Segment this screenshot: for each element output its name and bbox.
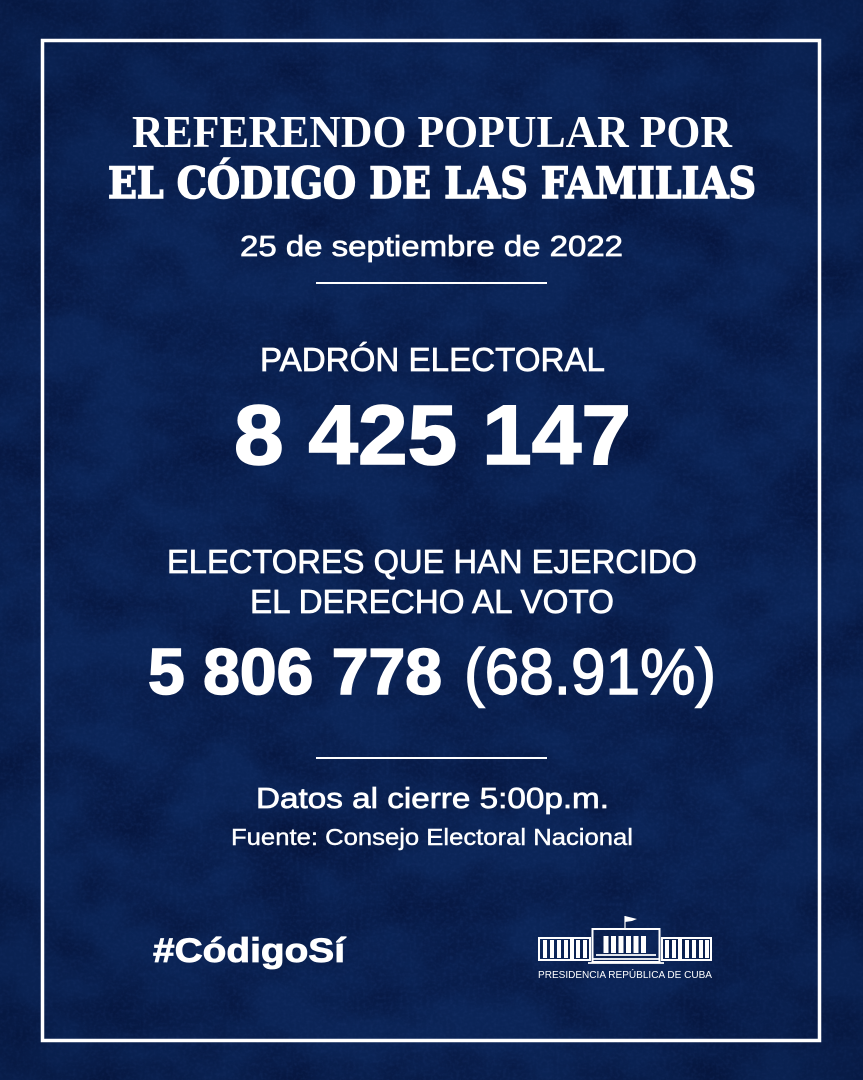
window bars — [545, 940, 707, 958]
logo text: PRESIDENCIA REPÚBLICA DE CUBA — [538, 968, 712, 981]
heading: voters — [167, 543, 697, 620]
number: electoral roll: 8 425 147 — [234, 388, 631, 482]
source: Fuente: Consejo Electoral Nacional — [231, 824, 633, 850]
flag — [624, 916, 626, 929]
closing time note: Datos al cierre 5:00p.m. — [256, 783, 609, 815]
title line 1: REFERENDO POPULAR POR — [132, 106, 733, 157]
left wings — [539, 938, 571, 960]
central building — [592, 929, 660, 962]
heading line 2: EL DERECHO AL VOTO — [250, 583, 614, 620]
bottom divider — [316, 757, 547, 759]
heading line 1: ELECTORES QUE HAN EJERCIDO — [167, 543, 697, 580]
hashtag: #CódigoSí — [153, 932, 347, 970]
icon: palace — [539, 916, 711, 963]
percentage: (68.91%) — [464, 635, 716, 708]
date: 25 de septiembre de 2022 — [240, 231, 623, 263]
top divider — [316, 282, 547, 284]
title line 2: EL CÓDIGO DE LAS FAMILIAS — [108, 158, 756, 209]
columns — [606, 936, 644, 953]
number: voters and percentage — [148, 635, 716, 708]
right wings — [662, 938, 679, 960]
logo: Presidencia República de Cuba — [538, 916, 712, 981]
title — [108, 106, 756, 209]
voter count: 5 806 778 — [148, 635, 442, 708]
heading: electoral roll: PADRÓN ELECTORAL — [260, 341, 605, 378]
steps — [588, 955, 664, 963]
